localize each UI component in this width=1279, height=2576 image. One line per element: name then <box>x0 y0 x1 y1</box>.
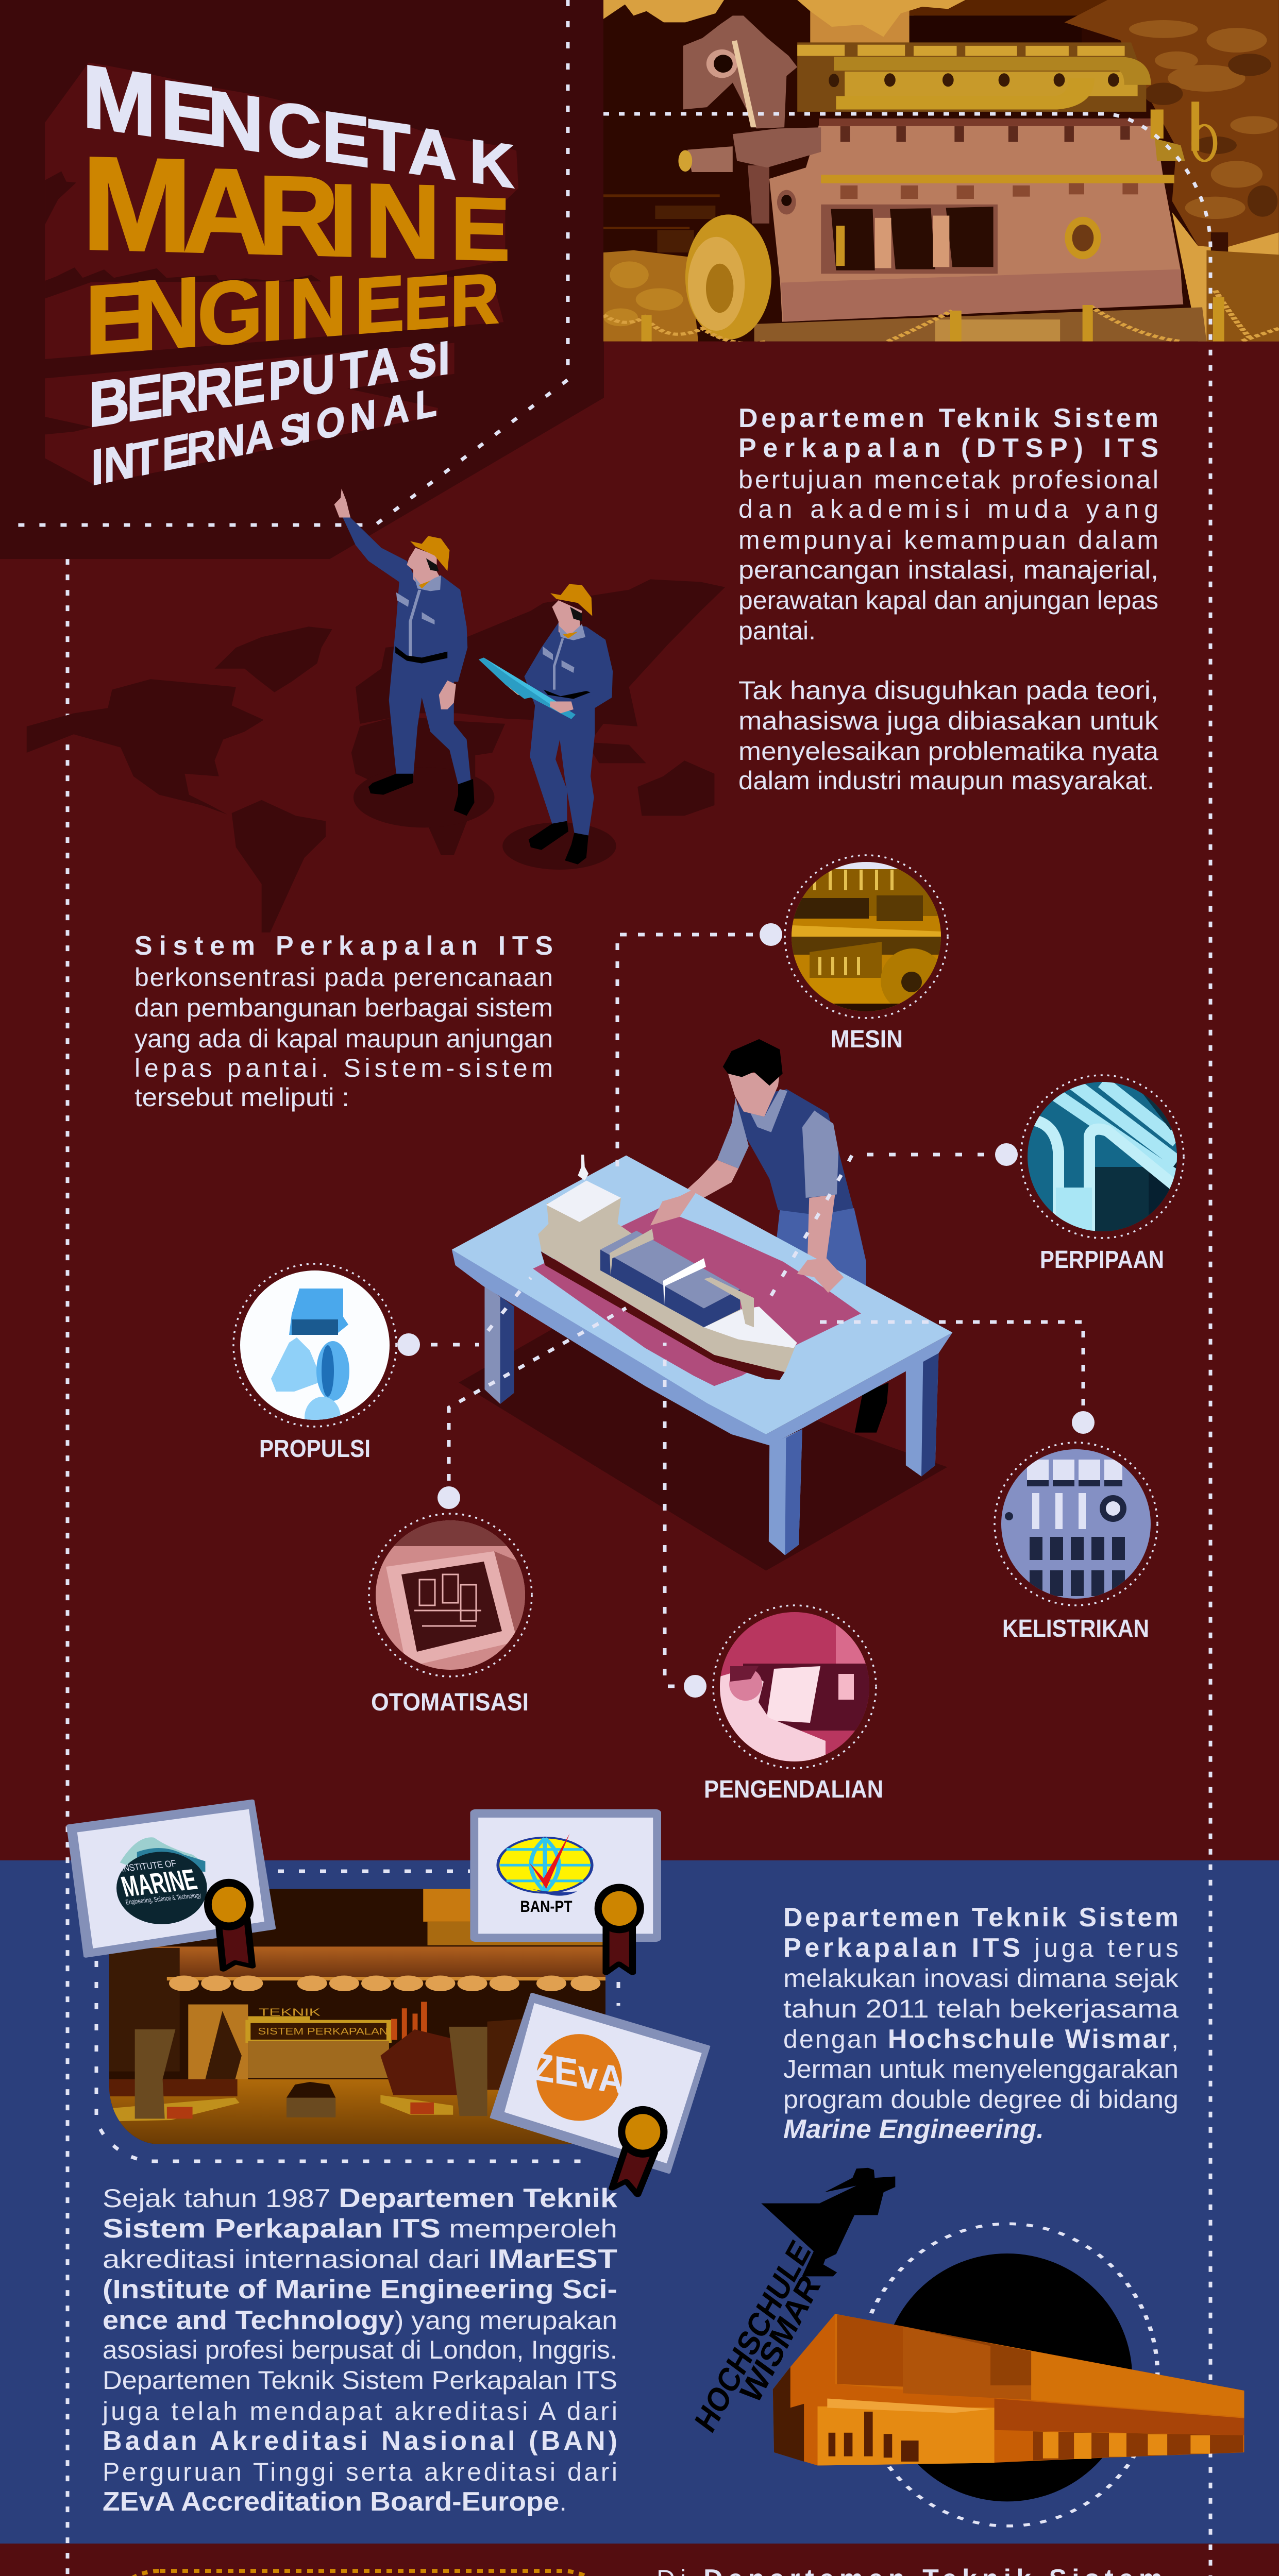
title line: MENCETAK: M <box>82 45 156 156</box>
title line: BERREPUTASI: I <box>438 332 450 385</box>
text block: Sistem Perkapalan ITS: Sistem Perkapalan ITS <box>134 931 553 961</box>
system item: kelistrikan <box>995 1411 1157 1642</box>
title line: MENCETAK: C <box>267 85 321 176</box>
system item: mesin: MESIN <box>831 1026 903 1053</box>
world map silhouette <box>27 579 725 933</box>
photo: department building: SISTEM PERKAPALAN <box>258 2027 388 2037</box>
connector: perpipaan <box>768 1155 1006 1301</box>
title line: MARINE: R <box>258 152 339 280</box>
system item: perpipaan <box>995 1075 1184 1274</box>
title line: ENGINEER: E <box>403 259 450 346</box>
illustration: Hochschule Wismar <box>761 2168 1244 2526</box>
title extruded shadow <box>45 62 518 485</box>
title line: MENCETAK: T <box>368 105 410 188</box>
title line: MENCETAK: A <box>408 112 457 194</box>
title line: INTERNASIONAL: N <box>104 433 136 494</box>
title line: INTERNASIONAL: I <box>301 403 311 452</box>
title line: INTERNASIONAL: S <box>280 403 306 456</box>
illustration: man with ship model on table <box>452 1039 952 1571</box>
title line: INTERNASIONAL: L <box>415 380 437 428</box>
table shadow <box>459 1327 947 1571</box>
text block: Hochschule Wismar cooperation: tahun 2011 telah bekerjasama <box>783 1994 1179 2023</box>
title line: MARINE: N <box>365 162 441 281</box>
text block: DTSP intro: dalam industri maupun masyarakat. <box>738 766 1154 795</box>
text block: Sistem Perkapalan ITS <box>134 931 553 1112</box>
text block: Sistem Perkapalan ITS: lepas pantai. Sistem-sistem <box>134 1054 553 1082</box>
title line: INTERNASIONAL: E <box>162 424 190 481</box>
mat on the table <box>533 1208 861 1386</box>
text block: Sistem Perkapalan ITS: yang ada di kapal maupun anjungan <box>134 1024 553 1053</box>
title line: BERREPUTASI: S <box>408 332 436 390</box>
title line: BERREPUTASI: U <box>301 344 335 407</box>
text block: accreditation history: Sistem Perkapalan ITS memperoleh <box>103 2214 617 2244</box>
connector: pengendalian <box>665 1343 695 1686</box>
title line: ENGINEER: G <box>197 260 263 365</box>
text block: DTSP intro: pantai. <box>738 616 816 645</box>
text block: DTSP intro: menyelesaikan problematika nyata <box>738 737 1158 766</box>
system item: perpipaan: PERPIPAAN <box>1040 1246 1164 1274</box>
certificates and medals <box>69 1801 709 2195</box>
title line: INTERNASIONAL: O <box>316 397 345 449</box>
text block: accreditation history: (Institute of Marine Engineering Sci- <box>103 2275 617 2304</box>
title line: BERREPUTASI: A <box>367 336 399 397</box>
text block: Hochschule Wismar cooperation: melakukan inovasi dimana sejak <box>783 1964 1179 1993</box>
text block: DTSP intro: Tak hanya disuguhkan pada teori, <box>738 676 1158 705</box>
dashed ring <box>859 2224 1157 2526</box>
system item: otomatisasi <box>369 1486 532 1716</box>
ship model <box>538 1155 797 1380</box>
system item: mesin <box>760 855 948 1053</box>
engineer pointing up <box>334 488 494 827</box>
title line: ENGINEER: I <box>261 263 283 359</box>
text block: accreditation history: juga telah mendapat akreditasi A dari <box>102 2397 617 2426</box>
title line: BERREPUTASI: E <box>232 350 265 418</box>
text block: accreditation history <box>102 2183 617 2517</box>
certificate: ZEvA <box>492 1994 709 2173</box>
text block: Sistem Perkapalan ITS: tersebut meliputi : <box>134 1083 349 1112</box>
connector: otomatisasi <box>449 1308 626 1498</box>
title line: ENGINEER: E <box>85 262 147 376</box>
certificate: Institute of Marine <box>69 1801 274 1956</box>
title line: INTERNASIONAL: A <box>383 385 410 435</box>
text block: Hochschule Wismar cooperation: Marine Engineering. <box>783 2114 1044 2144</box>
title line: BERREPUTASI: R <box>196 354 232 423</box>
medal on BAN-PT certificate <box>595 1884 644 1973</box>
man <box>650 1039 866 1293</box>
certificate: BAN-PT <box>470 1809 661 1942</box>
certificate: BAN-PT: BAN-PT <box>520 1897 573 1916</box>
text block: accreditation history: akreditasi internasional dari IMarEST <box>103 2244 617 2274</box>
gold dashed outline around classroom photo <box>103 2571 618 2576</box>
text block: DTSP intro: perancangan instalasi, manajerial, <box>738 555 1158 584</box>
title line: MARINE: I <box>329 163 358 278</box>
text block: accreditation history: asosiasi profesi berpusat di London, Inggris. <box>103 2335 617 2364</box>
label: Hochschule: HOCHSCHULE <box>689 2234 817 2439</box>
text block: DTSP intro: Departemen Teknik Sistem <box>738 403 1158 433</box>
text block: Hochschule Wismar cooperation: program double degree di bidang <box>783 2085 1179 2114</box>
silhouette: photographer <box>761 2168 895 2276</box>
text block: accreditation history: Departemen Teknik Sistem Perkapalan ITS <box>103 2366 617 2395</box>
photo: marine engine <box>603 0 1279 343</box>
certificate: ZEvA: ZEvA <box>532 2044 624 2103</box>
title line: INTERNASIONAL: R <box>187 419 216 476</box>
text block: DTSP intro: bertujuan mencetak profesional <box>738 465 1158 494</box>
text block: Hochschule Wismar cooperation: Perkapalan ITS juga terus <box>783 1933 1179 1963</box>
panel: accreditation blue band <box>0 1860 1279 2544</box>
text block: accreditation history: ence and Technology ) yang merupakan <box>103 2306 617 2335</box>
panel: dark title shape <box>0 0 604 559</box>
title line: BERREPUTASI: R <box>160 358 198 430</box>
text block: DTSP intro: mempunyai kemampuan dalam <box>738 526 1158 554</box>
system item: pengendalian: PENGENDALIAN <box>704 1776 883 1803</box>
text block: Hochschule Wismar cooperation: dengan Hochschule Wismar, <box>783 2024 1179 2054</box>
title line: ENGINEER: N <box>133 256 200 372</box>
title line: BERREPUTASI: T <box>340 340 368 400</box>
system item: propulsi <box>233 1264 420 1463</box>
text block: DTSP intro: mahasiswa juga dibiasakan untuk <box>738 706 1159 735</box>
black disc <box>882 2253 1132 2501</box>
title line: MENCETAK: E <box>322 97 369 182</box>
man's resting hand <box>797 1258 844 1293</box>
text block: DTSP intro <box>738 403 1159 795</box>
system item: pengendalian <box>684 1605 883 1803</box>
man's pointing hand <box>650 1186 700 1226</box>
text block: DTSP intro: perawatan kapal dan anjungan lepas <box>738 586 1158 615</box>
text block: accreditation history: Sejak tahun 1987 Departemen Teknik <box>103 2183 617 2213</box>
building photo <box>773 2314 1244 2466</box>
text block: Sistem Perkapalan ITS: berkonsentrasi pada perencanaan <box>134 963 553 992</box>
title line: MENCETAK: N <box>208 74 264 169</box>
title block <box>45 45 518 496</box>
text block: accreditation history: ZEvA Accreditation Board-Europe . <box>103 2487 567 2517</box>
man's back boot <box>855 1383 888 1433</box>
title line: MENCETAK: K <box>470 127 514 201</box>
photo: department building <box>109 1889 607 2145</box>
certificate: Institute of Marine: MARINE <box>117 1863 200 1903</box>
title line: INTERNASIONAL: N <box>216 415 245 470</box>
title line: ENGINEER: R <box>450 259 499 342</box>
dashed outline around campus photo <box>96 1871 618 2161</box>
medal on ZEvA certificate <box>612 2106 667 2195</box>
label: Wismar: WISMAR <box>734 2268 827 2410</box>
title line: MARINE: A <box>182 142 270 280</box>
title line: INTERNASIONAL: T <box>132 429 158 487</box>
text block: Hochschule Wismar cooperation: Departemen Teknik Sistem <box>783 1903 1179 1933</box>
certificate: Institute of Marine: Engineering, Science & Technology <box>125 1891 202 1906</box>
title line: MENCETAK: E <box>161 63 216 163</box>
title line: INTERNASIONAL: N <box>350 392 376 442</box>
medal on first certificate <box>204 1879 254 1970</box>
title line: BERREPUTASI: P <box>268 347 300 412</box>
text block: accreditation history: Perguruan Tinggi serta akreditasi dari <box>103 2458 617 2486</box>
system item: kelistrikan: KELISTRIKAN <box>1002 1615 1149 1642</box>
title line: ENGINEER: N <box>289 258 347 357</box>
illustration: two engineers <box>334 488 616 870</box>
photo: department building: TEKNIK <box>259 2006 321 2018</box>
title line: MARINE: E <box>451 178 510 279</box>
text block: Hochschule Wismar cooperation <box>783 1903 1179 2144</box>
dashed outline inside the title panel <box>13 0 568 525</box>
engineer holding plans <box>479 584 616 870</box>
title line: BERREPUTASI: E <box>127 361 163 435</box>
text block: accreditation history: Badan Akreditasi Nasional (BAN) <box>103 2426 617 2456</box>
connector: propulsi <box>409 1278 531 1345</box>
text block: DTSP intro: dan akademisi muda yang <box>738 495 1158 523</box>
connector: mesin <box>617 935 771 1167</box>
text block: Sistem Perkapalan ITS: dan pembangunan berbagai sistem <box>134 993 553 1022</box>
title line: ENGINEER: E <box>355 259 405 350</box>
system item: otomatisasi: OTOMATISASI <box>371 1689 529 1716</box>
title line: INTERNASIONAL: A <box>245 410 274 464</box>
text block: Hochschule Wismar cooperation: Jerman untuk menyelenggarakan <box>783 2055 1179 2083</box>
text block: DTSP intro: Perkapalan (DTSP) ITS <box>738 433 1158 463</box>
connector: kelistrikan <box>812 1322 1083 1422</box>
title line: MARINE: M <box>81 128 192 280</box>
table <box>452 1156 952 1555</box>
certificate: Institute of Marine: INSTITUTE OF <box>120 1858 177 1874</box>
title line: BERREPUTASI: B <box>89 364 129 440</box>
system item: propulsi: PROPULSI <box>259 1435 371 1463</box>
title line: INTERNASIONAL: I <box>91 437 104 496</box>
